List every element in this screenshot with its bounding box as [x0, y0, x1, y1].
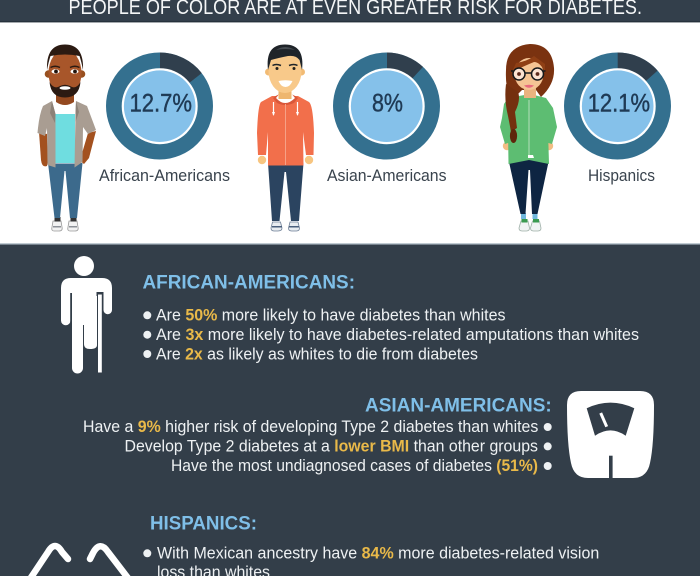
figure: African-American man: [38, 44, 96, 231]
bullet list: African-Americans: Are 2x as likely as whites to die from diabetes: [156, 345, 478, 363]
heading: African-Americans: AFRICAN-AMERICANS:: [142, 272, 355, 293]
section: African-Americans: [142, 272, 639, 363]
section: Asian-Americans: [83, 396, 552, 475]
donut chart: Asian-Americans 8%: 8%: [372, 90, 403, 118]
panel: group statistics: [0, 243, 700, 576]
figure: Asian-American man: [257, 44, 314, 231]
bullet list: African-Americans: [143, 306, 639, 363]
label: Hispanics: Hispanics: [588, 166, 655, 185]
icon: eyeglasses: [28, 546, 131, 576]
section: Hispanics: [143, 513, 599, 576]
label: Asian-Americans: Asian-Americans: [327, 166, 446, 185]
bullet list: Asian-Americans: Develop Type 2 diabetes at a lower BMI than other groups: [124, 438, 538, 456]
bullet list: African-Americans: Are 3x more likely to have diabetes-related amputations than whites: [156, 326, 639, 344]
label: African-Americans: African-Americans: [99, 166, 230, 185]
bullet list: Asian-Americans: [83, 418, 552, 475]
bullet list: Hispanics: With Mexican ancestry have 84% more diabetes-related vision: [157, 544, 599, 562]
figure: Hispanic woman: [500, 44, 557, 231]
donut chart: Hispanics 12.1%: 12.1%: [588, 90, 650, 118]
heading: Asian-Americans: ASIAN-AMERICANS:: [365, 396, 552, 417]
icon: weighing scale: [567, 391, 654, 478]
donut chart: African-Americans 12.7%: 12.7%: [130, 90, 192, 118]
donut chart: African-Americans 12.7%: [106, 52, 213, 160]
bullet list: Asian-Americans: Have a 9% higher risk of developing Type 2 diabetes than whites: [83, 418, 538, 436]
donut chart: Hispanics 12.1%: [564, 52, 671, 160]
icon: person with amputated leg and crutch: [61, 256, 112, 374]
bullet list: Asian-Americans: Have the most undiagnosed cases of diabetes (51%): [171, 457, 538, 475]
heading: Hispanics: HISPANICS:: [150, 513, 257, 534]
bullet list: Hispanics: [143, 544, 599, 576]
donut chart: Asian-Americans 8%: [333, 52, 440, 160]
bullet list: African-Americans: Are 50% more likely to have diabetes than whites: [156, 306, 506, 324]
